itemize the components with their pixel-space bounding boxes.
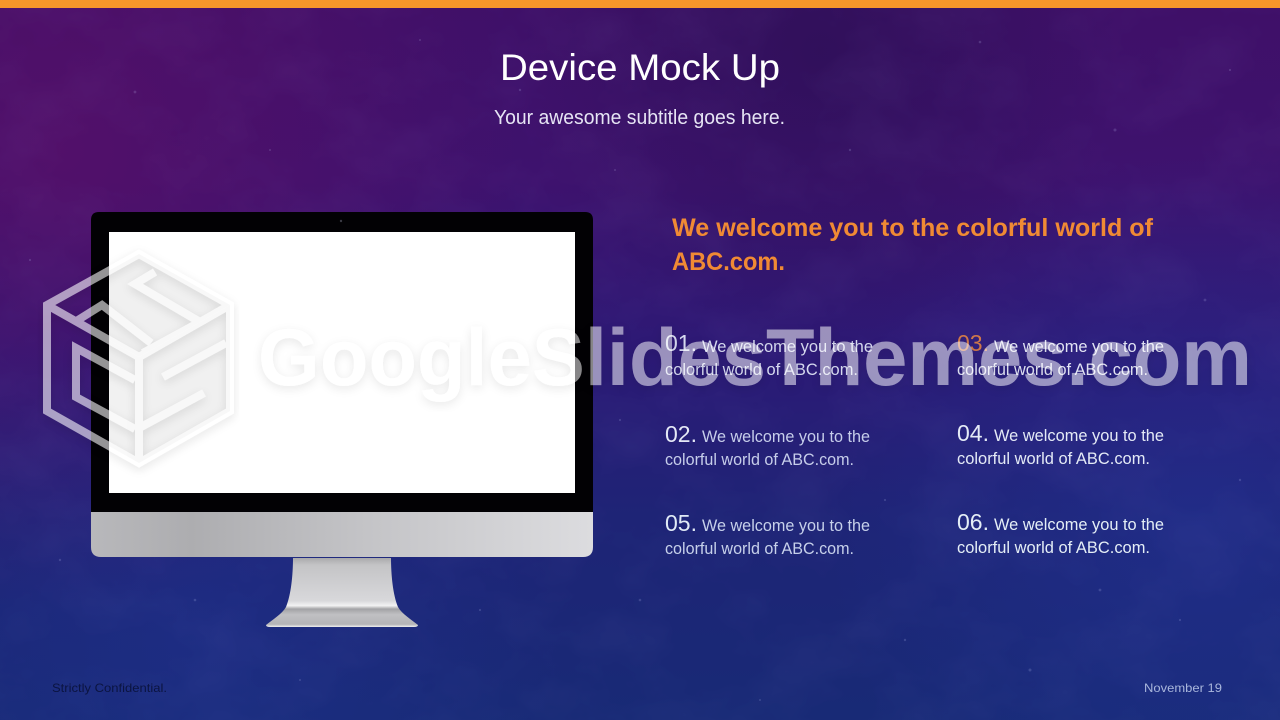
watermark cube logo: [47, 254, 230, 463]
list item 06: 06.: [957, 509, 989, 535]
monitor camera: [340, 220, 342, 222]
monitor mockup: [91, 212, 593, 627]
list item 06: We welcome you to the: [994, 516, 1164, 534]
monitor black bezel: [91, 212, 593, 512]
list item 03: colorful world of ABC.com.: [957, 361, 1148, 379]
list item 02: We welcome you to the: [702, 428, 870, 446]
list item 03: [957, 330, 1164, 379]
list item 01: 01.: [665, 330, 697, 356]
cube face shading on screen: [109, 258, 226, 456]
monitor stand: [266, 558, 418, 627]
list item 01: colorful world of ABC.com.: [665, 361, 858, 379]
monitor silver chin: [91, 512, 593, 557]
list item 04: colorful world of ABC.com.: [957, 450, 1150, 468]
heading: welcome: ABC.com.: [672, 248, 785, 276]
list item 01: We welcome you to the: [702, 338, 873, 356]
heading: welcome: [672, 214, 1154, 276]
list item 03: We welcome you to the: [994, 338, 1164, 356]
top accent bar: [0, 0, 1280, 8]
list item 04: We welcome you to the: [994, 427, 1164, 445]
list item 02: 02.: [665, 421, 697, 447]
list item 04: 04.: [957, 420, 989, 446]
list item 05: We welcome you to the: [702, 517, 870, 535]
list item 02: [665, 421, 870, 469]
list item 03: 03.: [957, 330, 989, 356]
list item 06: [957, 509, 1164, 557]
list item 05: [665, 510, 870, 558]
list item 04: [957, 420, 1164, 468]
monitor white screen: [109, 232, 575, 493]
list item 01: [665, 330, 873, 379]
list item 05: 05.: [665, 510, 697, 536]
title: Device Mock Up: [500, 47, 780, 88]
footer: confidentiality note: Strictly Confidential.: [52, 681, 167, 695]
footer: date: November 19: [1144, 681, 1222, 695]
heading: welcome: We welcome you to the colorful world of: [672, 214, 1154, 242]
list item 05: colorful world of ABC.com.: [665, 540, 854, 558]
watermark: [47, 254, 1252, 463]
list item 02: colorful world of ABC.com.: [665, 451, 854, 469]
list item 06: colorful world of ABC.com.: [957, 539, 1150, 557]
watermark wordmark: GoogleSlidesThemes.com: [258, 313, 1252, 403]
subtitle: Your awesome subtitle goes here.: [494, 107, 785, 129]
